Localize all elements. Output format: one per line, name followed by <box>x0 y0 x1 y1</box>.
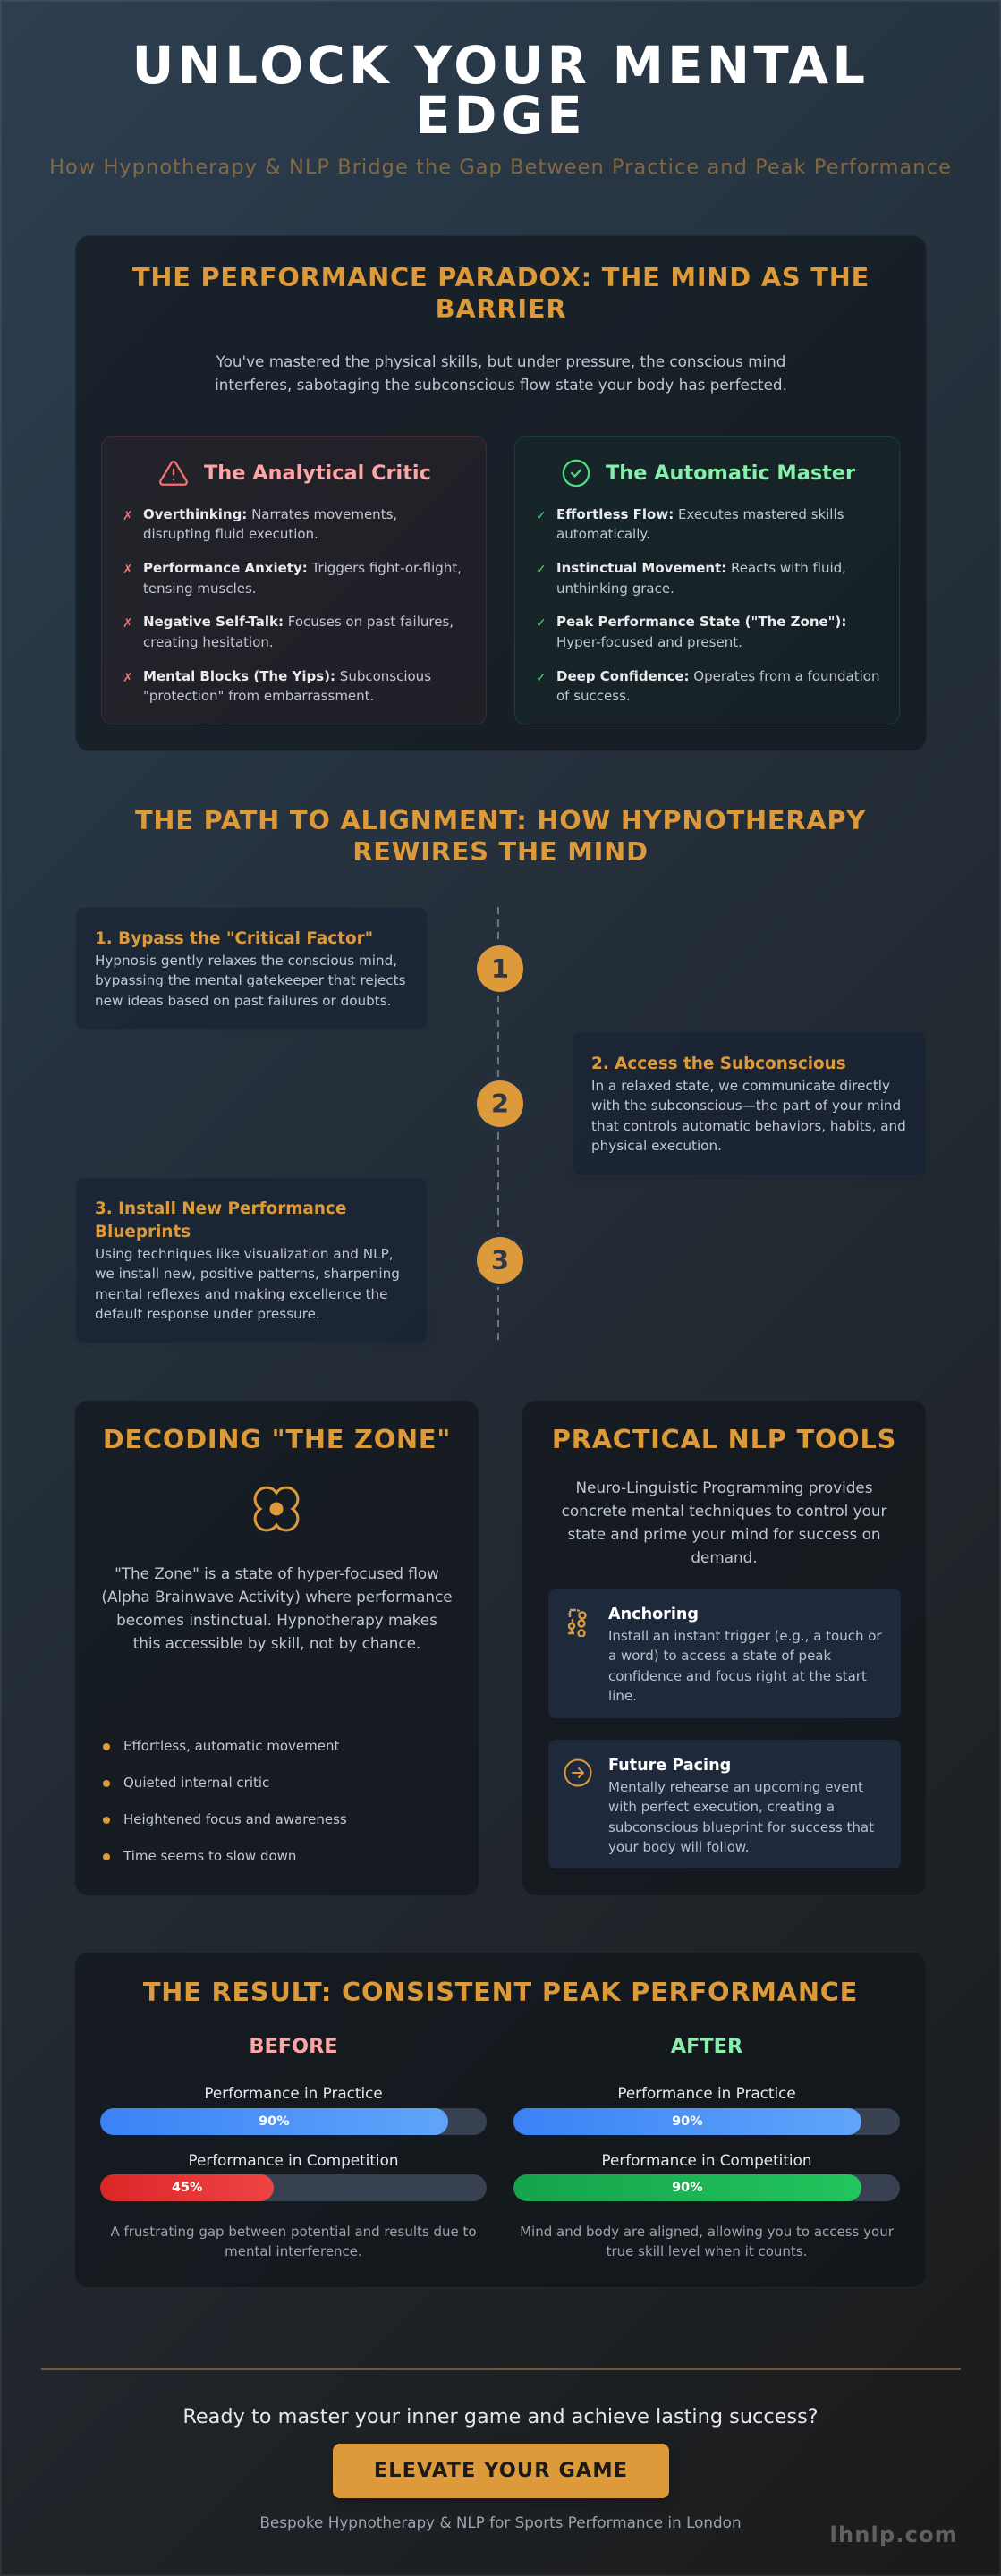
list: zone characteristics <box>103 1738 347 1864</box>
label: before: BEFORE <box>249 2035 338 2058</box>
intro text: interferes, sabotaging the subconscious flow state your body has perfected. <box>215 376 787 394</box>
heading: practical nlp tools: PRACTICAL NLP TOOLS <box>552 1424 896 1454</box>
caption: after <box>520 2224 894 2259</box>
nlp description: concrete mental techniques to control your <box>562 1502 886 1520</box>
panel: the performance paradox <box>75 235 927 751</box>
step 2 body: with the subconscious—the part of your mind <box>591 1097 901 1114</box>
heading: performance paradox <box>132 262 870 324</box>
list: master traits: of success. <box>556 688 631 704</box>
button: elevate your game: ELEVATE YOUR GAME <box>374 2459 628 2482</box>
list: master traits: Effortless Flow: Executes mastered skills <box>556 506 844 522</box>
heading: the path to alignment: REWIRES THE MIND <box>352 836 649 867</box>
heading: decoding the zone: DECODING "THE ZONE" <box>103 1424 451 1454</box>
step number 3: 3 <box>491 1245 509 1275</box>
body: anchoring: line. <box>608 1688 637 1704</box>
heading: the path to alignment <box>135 805 866 867</box>
list: critic traits: tensing muscles. <box>143 580 257 597</box>
zone description: this accessible by skill, not by chance. <box>133 1634 420 1652</box>
bar: practice 90%: 90% <box>259 2114 290 2129</box>
bar: competition 45%: 45% <box>172 2181 202 2195</box>
button: elevate your game <box>333 2444 669 2498</box>
icon: warning triangle <box>159 461 188 486</box>
nlp description: Neuro-Linguistic Programming provides <box>575 1479 873 1496</box>
bar: practice 90% <box>100 2108 487 2135</box>
step 3 title: Blueprints <box>95 1223 191 1241</box>
caption: before: mental interference. <box>225 2243 362 2259</box>
list: master traits: Deep Confidence: Operates from a foundation <box>556 668 879 684</box>
bar: competition 45% <box>100 2174 487 2201</box>
nlp description <box>562 1479 887 1566</box>
list: master traits: automatically. <box>556 526 650 542</box>
title: EDGE <box>415 86 586 146</box>
body: anchoring <box>608 1628 882 1704</box>
body: anchoring: confidence and focus right at the start <box>608 1668 867 1684</box>
step 3 title <box>95 1199 346 1241</box>
title <box>132 36 869 146</box>
card: the analytical critic: ✗ <box>123 563 133 577</box>
step 3 card <box>75 1177 428 1343</box>
call to action text: Ready to master your inner game and achieve lasting success? <box>182 2405 819 2428</box>
intro text <box>215 352 787 394</box>
body: future pacing: with perfect execution, creating a <box>608 1799 835 1815</box>
list: master traits: Hyper-focused and present. <box>556 634 742 650</box>
step 3 body: mental reflexes and making excellence the <box>95 1286 388 1302</box>
heading: the analytical critic: The Analytical Critic <box>204 462 431 485</box>
column: before <box>100 2035 487 2259</box>
step number 3 <box>477 1237 523 1284</box>
step 1 card <box>75 907 428 1030</box>
heading: performance paradox: BARRIER <box>436 293 566 324</box>
icon: anchoring nodes <box>567 1608 587 1637</box>
step 2 body <box>591 1078 906 1154</box>
tool card: future pacing <box>548 1740 901 1868</box>
card: the analytical critic <box>101 436 487 724</box>
icon: flower <box>254 1487 299 1531</box>
timeline: dashed line with numbered steps <box>474 907 526 1340</box>
list: zone characteristics: Effortless, automatic movement <box>123 1738 339 1754</box>
watermark: lhnlp.com <box>830 2522 958 2547</box>
list: zone characteristics: Heightened focus and awareness <box>123 1811 347 1827</box>
step 3 body <box>95 1246 400 1322</box>
step 1 body: new ideas based on past failures or doubts. <box>95 993 392 1009</box>
intro text: You've mastered the physical skills, but under pressure, the conscious mind <box>216 352 785 370</box>
body: future pacing: Mentally rehearse an upcoming event <box>608 1779 863 1795</box>
body: anchoring: a word) to access a state of peak <box>608 1648 831 1664</box>
bar: competition 90%: 90% <box>672 2181 703 2195</box>
step number 2: 2 <box>491 1089 509 1119</box>
card: the automatic master: ✓ <box>536 563 547 577</box>
list: master traits: unthinking grace. <box>556 580 674 597</box>
list: critic traits <box>123 506 462 704</box>
icon: check circle <box>562 460 590 487</box>
list: critic traits: Negative Self-Talk: Focuses on past failures, <box>143 614 454 630</box>
panel: decoding the zone <box>74 1400 479 1896</box>
label: performance in competition: Performance in Competition <box>188 2151 399 2169</box>
list: critic traits: Mental Blocks (The Yips): Subconscious <box>143 668 431 684</box>
card: the analytical critic: ✗ <box>123 616 133 631</box>
list: zone characteristics: Time seems to slow down <box>123 1848 296 1864</box>
label: performance in practice: Performance in Practice <box>204 2084 383 2102</box>
list: master traits: Peak Performance State ("The Zone"): <box>556 614 846 630</box>
list: critic traits: "protection" from embarrassment. <box>143 688 374 704</box>
step 3 body: we install new, positive patterns, sharpening <box>95 1266 400 1282</box>
step 2 body: physical execution. <box>591 1138 722 1154</box>
step 2 body: In a relaxed state, we communicate directly <box>591 1078 890 1094</box>
zone description: becomes instinctual. Hypnotherapy makes <box>116 1611 437 1629</box>
title: anchoring: Anchoring <box>608 1606 699 1623</box>
title: UNLOCK YOUR MENTAL <box>132 36 869 96</box>
nlp description: demand. <box>691 1548 758 1566</box>
card: the analytical critic: ✗ <box>123 671 133 685</box>
caption: before: A frustrating gap between potential and results due to <box>110 2224 477 2240</box>
tool card: anchoring <box>548 1589 901 1718</box>
caption: after: Mind and body are aligned, allowing you to access your <box>520 2224 894 2240</box>
body: future pacing <box>608 1779 874 1855</box>
caption: before <box>110 2224 477 2259</box>
card: the automatic master: ✓ <box>536 671 547 685</box>
step 3 body: default response under pressure. <box>95 1306 320 1322</box>
card: the automatic master: ✓ <box>536 616 547 631</box>
bar: competition 90% <box>513 2174 900 2201</box>
step 2 title: 2. Access the Subconscious <box>591 1055 846 1073</box>
step number 2 <box>477 1080 523 1127</box>
zone description <box>101 1564 453 1652</box>
step 1 body: Hypnosis gently relaxes the conscious mind, <box>95 953 397 969</box>
zone description: "The Zone" is a state of hyper-focused flow <box>115 1564 439 1582</box>
step 1 body <box>95 953 406 1009</box>
list: master traits <box>536 506 879 704</box>
title: future pacing: Future Pacing <box>608 1757 731 1775</box>
subtitle: How Hypnotherapy & NLP Bridge the Gap Between Practice and Peak Performance <box>49 156 952 179</box>
card: the automatic master: ✓ <box>536 509 547 523</box>
body: future pacing: your body will follow. <box>608 1839 750 1855</box>
step 3 body: Using techniques like visualization and NLP, <box>95 1246 394 1262</box>
footer tagline: Bespoke Hypnotherapy & NLP for Sports Performance in London <box>259 2513 742 2531</box>
list: critic traits: creating hesitation. <box>143 634 274 650</box>
nlp description: state and prime your mind for success on <box>568 1525 880 1543</box>
label: after: AFTER <box>671 2035 742 2058</box>
icon: arrow in circle <box>564 1758 592 1787</box>
step 1 body: bypassing the mental gatekeeper that rejects <box>95 972 406 988</box>
heading: performance paradox: THE PERFORMANCE PARADOX: THE MIND AS THE <box>132 262 870 292</box>
caption: after: true skill level when it counts. <box>607 2243 807 2259</box>
label: performance in practice: Performance in Practice <box>617 2084 796 2102</box>
list: critic traits: Performance Anxiety: Triggers fight-or-flight, <box>143 560 462 576</box>
panel: practical nlp tools <box>522 1400 927 1896</box>
bar: practice 90% <box>513 2108 900 2135</box>
column: after <box>513 2035 900 2259</box>
panel: the result <box>74 1952 927 2288</box>
heading: the result: THE RESULT: CONSISTENT PEAK PERFORMANCE <box>143 1977 858 2007</box>
zone description: (Alpha Brainwave Activity) where performance <box>101 1588 453 1606</box>
step number 1: 1 <box>491 953 509 984</box>
list: critic traits: Overthinking: Narrates movements, <box>143 506 397 522</box>
body: anchoring: Install an instant trigger (e.g., a touch or <box>608 1628 882 1644</box>
step 2 body: that controls automatic behaviors, habits, and <box>591 1118 906 1134</box>
step number 1 <box>477 945 523 992</box>
list: critic traits: disrupting fluid execution. <box>143 526 318 542</box>
step 1 title: 1. Bypass the "Critical Factor" <box>95 929 373 948</box>
label: performance in competition: Performance in Competition <box>601 2151 812 2169</box>
heading: the path to alignment: THE PATH TO ALIGNMENT: HOW HYPNOTHERAPY <box>135 805 866 835</box>
list: zone characteristics: Quieted internal critic <box>123 1775 269 1791</box>
step 3 title: 3. Install New Performance <box>95 1199 346 1218</box>
body: future pacing: subconscious blueprint for success that <box>608 1819 874 1835</box>
card: the analytical critic: ✗ <box>123 509 133 523</box>
heading: the automatic master: The Automatic Master <box>606 462 855 485</box>
bar: practice 90%: 90% <box>672 2114 703 2129</box>
list: master traits: Instinctual Movement: Reacts with fluid, <box>556 560 846 576</box>
card: the automatic master <box>514 436 900 724</box>
step 2 card <box>572 1031 927 1176</box>
